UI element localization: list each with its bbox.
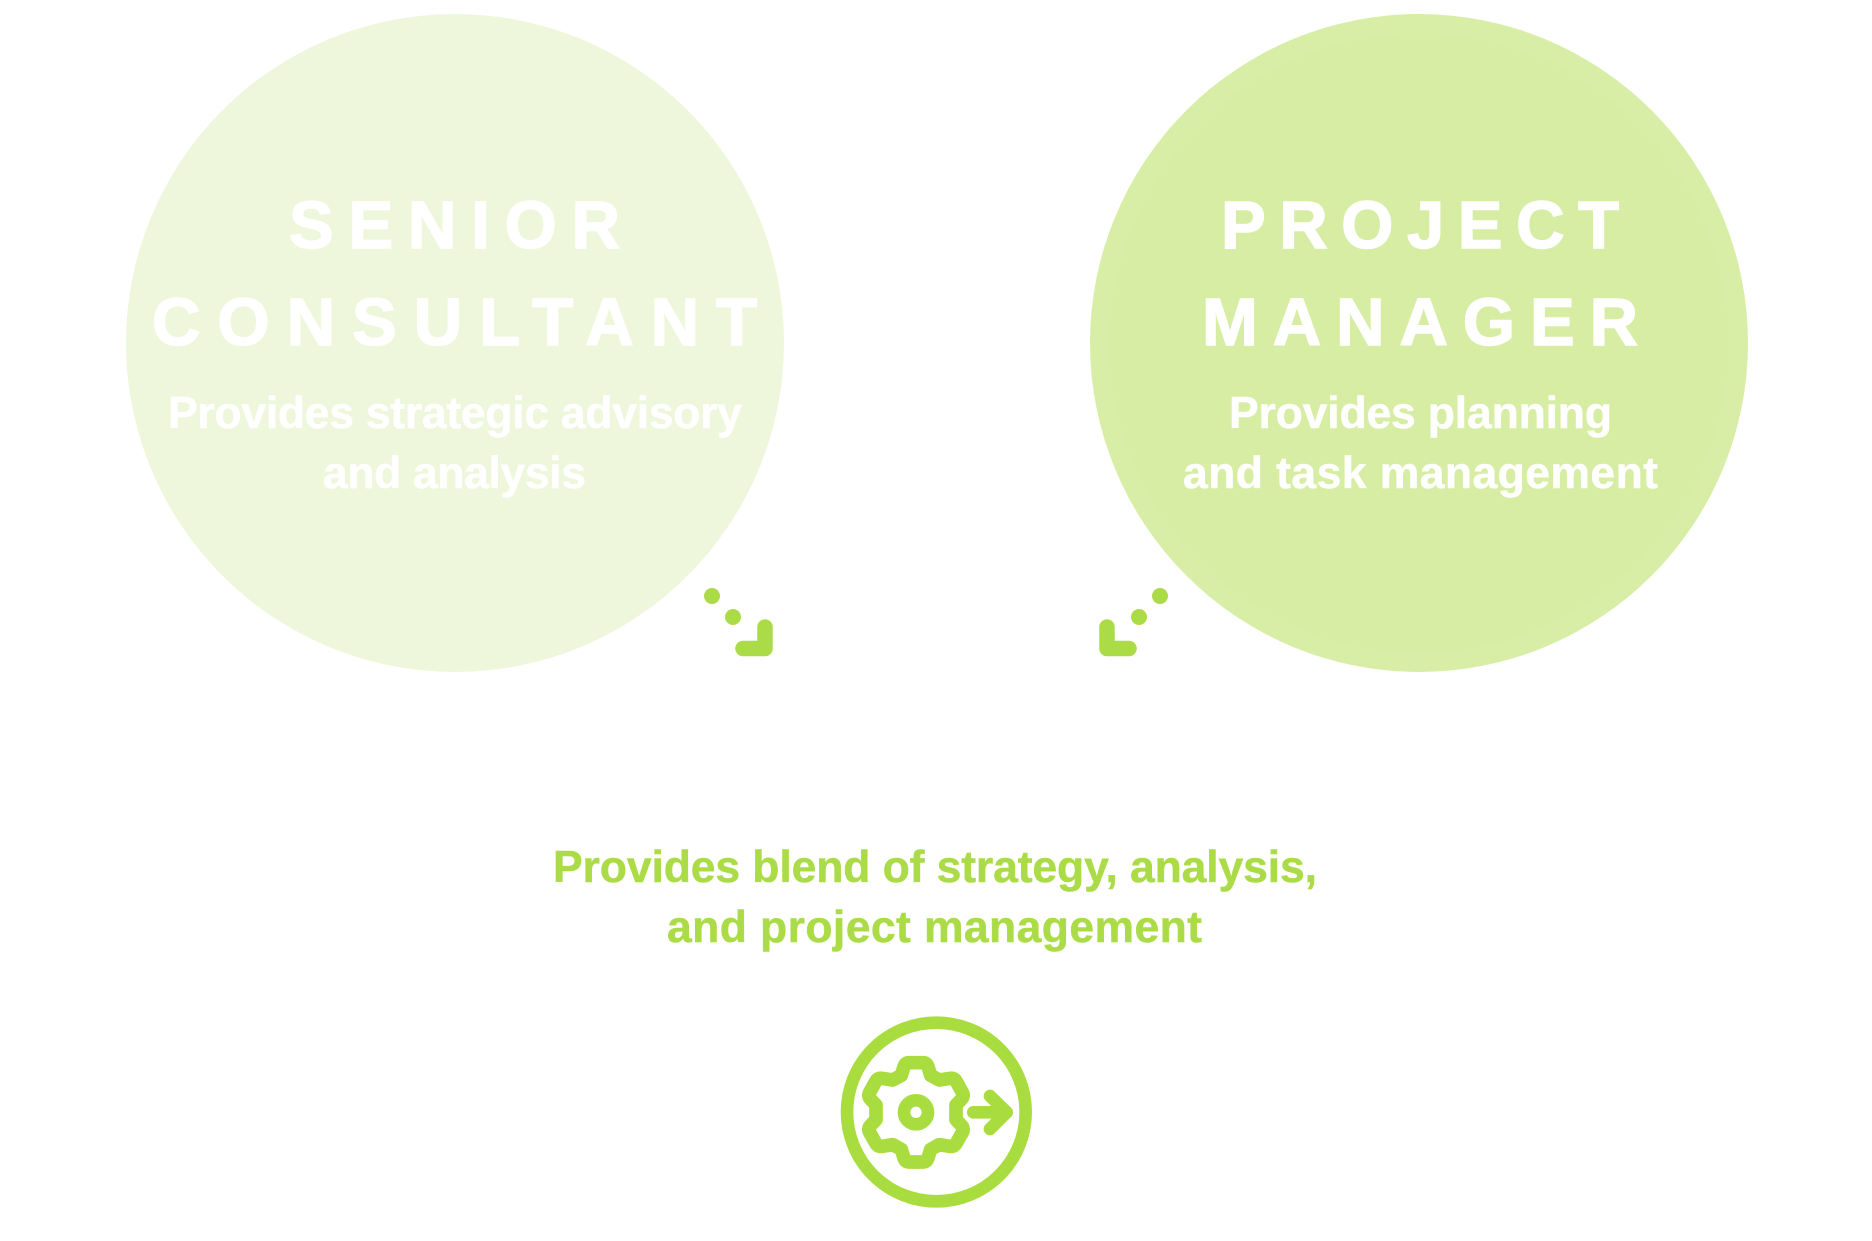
panel: senior consultant: [126, 14, 784, 672]
circle: senior consultant: [126, 14, 784, 672]
text: senior consultant description: [168, 389, 742, 498]
icon: gear with arrow: [847, 1023, 1026, 1201]
heading: senior consultant: CONSULTANT: [152, 285, 757, 360]
heading: senior consultant: [152, 188, 757, 360]
arrow: left circle to result: [704, 588, 765, 648]
text: project manager description: [1183, 389, 1658, 498]
heading: project manager: [1202, 188, 1638, 360]
text: senior consultant description: Provides strategic advisory: [168, 389, 742, 438]
circle: project manager: [1090, 14, 1748, 672]
arrow: right circle to result: [1107, 588, 1168, 648]
heading: senior consultant: SENIOR: [289, 188, 620, 263]
text: senior consultant description: and analysis: [323, 449, 586, 498]
text: combined result: Provides blend of strategy, analysis,: [553, 843, 1317, 892]
heading: project manager: PROJECT: [1221, 188, 1619, 263]
panel: project manager: [1090, 14, 1748, 672]
text: combined result: [553, 843, 1317, 952]
text: project manager description: Provides planning: [1229, 389, 1612, 438]
text: combined result: and project management: [667, 903, 1202, 952]
heading: project manager: MANAGER: [1202, 285, 1638, 360]
text: project manager description: and task management: [1183, 449, 1658, 498]
